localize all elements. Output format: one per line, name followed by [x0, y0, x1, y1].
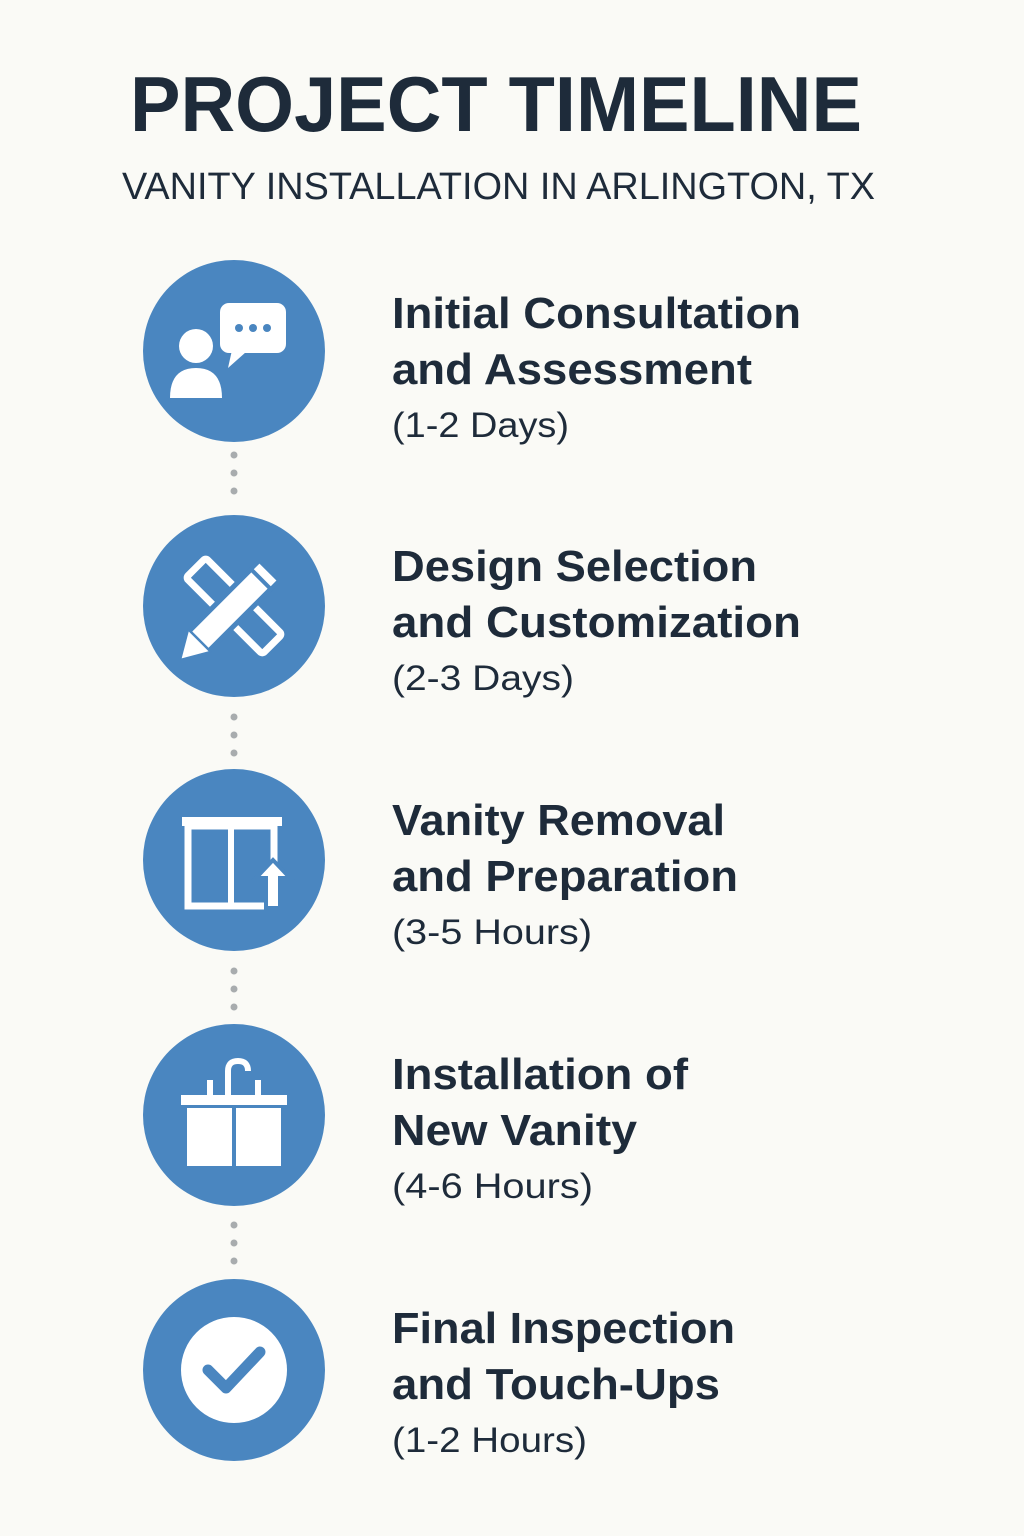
text: step 4: Installation of	[392, 1050, 688, 1099]
text: step 5: Final Inspection	[392, 1304, 735, 1353]
step 1: consultation	[143, 260, 801, 445]
subtitle: VANITY INSTALLATION IN ARLINGTON, TX	[122, 166, 875, 208]
icon: vanity with faucet	[143, 1024, 325, 1206]
step 5: inspection	[143, 1279, 735, 1461]
text: step 1: Initial Consultation	[392, 289, 801, 338]
text: step 1: (1-2 Days)	[392, 406, 569, 445]
text: step 4: New Vanity	[392, 1106, 638, 1155]
icon: pencil and ruler	[143, 515, 325, 697]
text: step 2	[392, 542, 801, 698]
text: step 4: (4-6 Hours)	[392, 1167, 593, 1206]
text: step 5: and Touch-Ups	[392, 1360, 720, 1409]
text: step 1: and Assessment	[392, 345, 752, 394]
text: step 4	[392, 1050, 688, 1206]
icon: cabinet with up arrow	[143, 769, 325, 951]
text: step 5: (1-2 Hours)	[392, 1421, 587, 1460]
connectors: dotted lines	[230, 452, 238, 1264]
title: PROJECT TIMELINE	[130, 60, 862, 148]
step 4: installation	[143, 1024, 688, 1206]
text: step 3: Vanity Removal	[392, 796, 725, 845]
text: step 5	[392, 1304, 735, 1460]
icon: person with speech bubble	[143, 260, 325, 442]
text: step 2: and Customization	[392, 598, 801, 647]
icon: check mark	[143, 1279, 325, 1461]
text: step 3: and Preparation	[392, 852, 738, 901]
text: step 3: (3-5 Hours)	[392, 913, 592, 952]
text: step 1	[392, 289, 801, 445]
text: step 3	[392, 796, 738, 952]
step 3: removal	[143, 769, 738, 952]
step 2: design	[143, 515, 801, 698]
text: step 2: (2-3 Days)	[392, 659, 574, 698]
text: step 2: Design Selection	[392, 542, 757, 591]
